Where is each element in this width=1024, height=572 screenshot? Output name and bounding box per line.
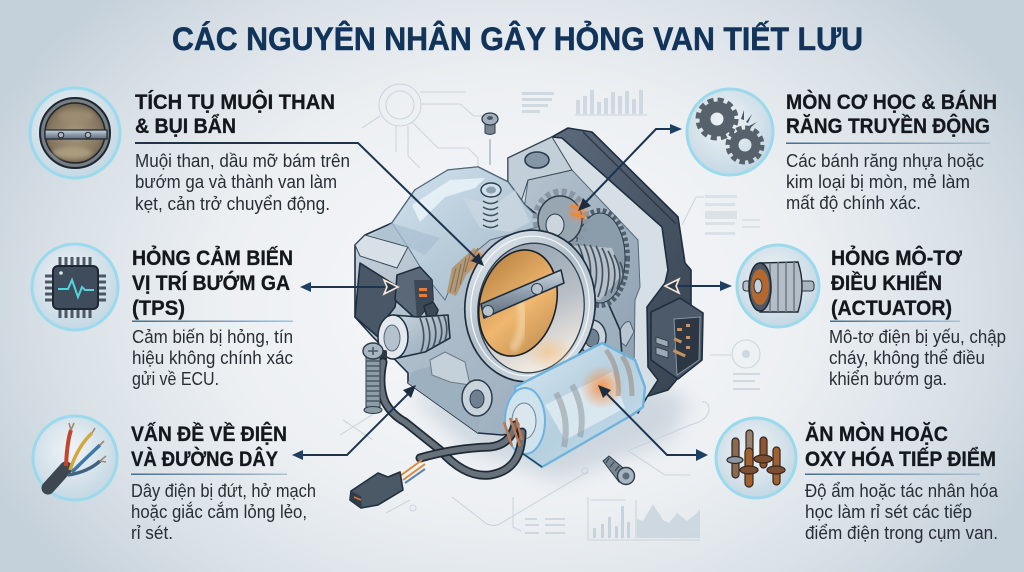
arrow: corrosion <box>598 385 708 461</box>
threaded side cylinder <box>378 315 450 359</box>
arrow: wiring <box>292 385 416 460</box>
heading: ĂN MÒN HOẶC <box>805 422 948 446</box>
lower bolt lug <box>462 380 492 416</box>
central throttle body illustration <box>350 113 703 508</box>
panel: mechanical wear <box>687 89 997 213</box>
description: mất độ chính xác. <box>786 193 921 213</box>
throttle position sensor block <box>355 263 438 337</box>
small recess on plate <box>620 322 634 346</box>
icon: sensor chip <box>32 244 118 330</box>
soot band near throat <box>447 248 499 296</box>
description: gửi về ECU. <box>132 369 219 389</box>
heading: VẤN ĐỀ VỀ ĐIỆN <box>131 422 287 446</box>
arrow: actuator double ended <box>665 279 732 293</box>
loose screw top <box>482 113 498 165</box>
throat outer ring <box>455 222 605 390</box>
wire harness <box>373 350 522 483</box>
arrow: TPS double ended <box>300 280 398 294</box>
icon: dirty butterfly valve <box>30 88 120 178</box>
description: Cảm biến bị hỏng, tín <box>132 327 293 347</box>
heading: VỊ TRÍ BƯỚM GA <box>132 271 290 295</box>
description: điểm điện trong cụm van. <box>805 523 998 543</box>
translucent dome <box>392 167 545 300</box>
heading: MÒN CƠ HỌC & BÁNH <box>786 90 997 114</box>
heading: (TPS) <box>132 297 185 320</box>
mounting lug hole <box>525 152 549 168</box>
panel: actuator failure <box>737 245 1006 389</box>
heading: HỎNG CẢM BIẾN <box>132 246 293 270</box>
arrow: soot to throat <box>135 143 484 266</box>
worm coil <box>572 244 623 300</box>
description: khiển bướm ga. <box>829 369 947 389</box>
description: hoặc giắc cắm lỏng lẻo, <box>131 501 307 522</box>
heading: VÀ ĐƯỜNG DÂY <box>131 447 278 471</box>
description: Độ ẩm hoặc tác nhân hóa <box>805 481 999 501</box>
drive gear <box>536 192 590 246</box>
description: học làm rỉ sét các tiếp <box>805 502 972 522</box>
top spring screw <box>481 183 501 229</box>
main housing <box>355 167 625 435</box>
translucent motor cylinder <box>505 343 645 467</box>
icon: motor rotor <box>737 245 819 327</box>
silver ledge <box>355 235 408 268</box>
description: kẹt, cản trở chuyển động. <box>135 194 330 214</box>
description: Các bánh răng nhựa hoặc <box>786 151 984 171</box>
description: Muội than, dầu mỡ bám trên <box>135 151 350 171</box>
recessed plate face <box>520 170 640 380</box>
back large gear <box>573 211 627 305</box>
panel: electrical and wiring <box>33 416 316 543</box>
description: Mô-tơ điện bị yếu, chập <box>829 327 1006 347</box>
arrow: gears <box>578 124 682 211</box>
heading: ĐIỀU KHIỂN <box>831 272 942 295</box>
heading: HỎNG MÔ-TƠ <box>831 246 962 270</box>
heading: RĂNG TRUYỀN ĐỘNG <box>786 114 990 138</box>
panel: corrosion <box>716 418 999 543</box>
panel: soot buildup <box>30 88 350 214</box>
plug connector <box>350 472 403 508</box>
description: bướm ga và thành van làm <box>135 172 337 192</box>
icon: corroded pins <box>716 418 796 498</box>
butterfly shaft <box>481 270 564 318</box>
heading: OXY HÓA TIẾP ĐIỂM <box>805 447 996 471</box>
arrows <box>135 124 732 461</box>
right bolt lug <box>578 320 606 354</box>
lower casting detail <box>408 358 480 433</box>
heading: (ACTUATOR) <box>831 297 952 320</box>
gear housing plate <box>508 137 668 413</box>
ground shadow <box>410 380 690 480</box>
heading: TÍCH TỤ MUỘI THAN <box>135 90 335 114</box>
panel: TPS sensor failure <box>32 244 293 389</box>
butterfly plate <box>467 241 569 365</box>
loose screw left <box>363 343 383 414</box>
title: CÁC NGUYÊN NHÂN GÂY HỎNG VAN TIẾT LƯU <box>172 21 863 57</box>
icon: worn gears <box>687 89 773 175</box>
faint technical background sketches <box>340 84 760 540</box>
right multi-pin connector <box>651 298 703 379</box>
loose bolt bottom <box>603 456 634 484</box>
description: cháy, không thể điều <box>829 348 985 368</box>
description: Dây điện bị đứt, hở mạch <box>131 481 316 501</box>
bore interior <box>469 236 593 380</box>
description: rỉ sét. <box>131 523 173 543</box>
description: kim loại bị mòn, mẻ làm <box>786 172 970 192</box>
description: hiệu không chính xác <box>132 348 293 368</box>
heading: & BỤI BẨN <box>135 115 236 138</box>
icon: frayed cable <box>33 416 117 500</box>
rear dark flange <box>552 128 691 397</box>
